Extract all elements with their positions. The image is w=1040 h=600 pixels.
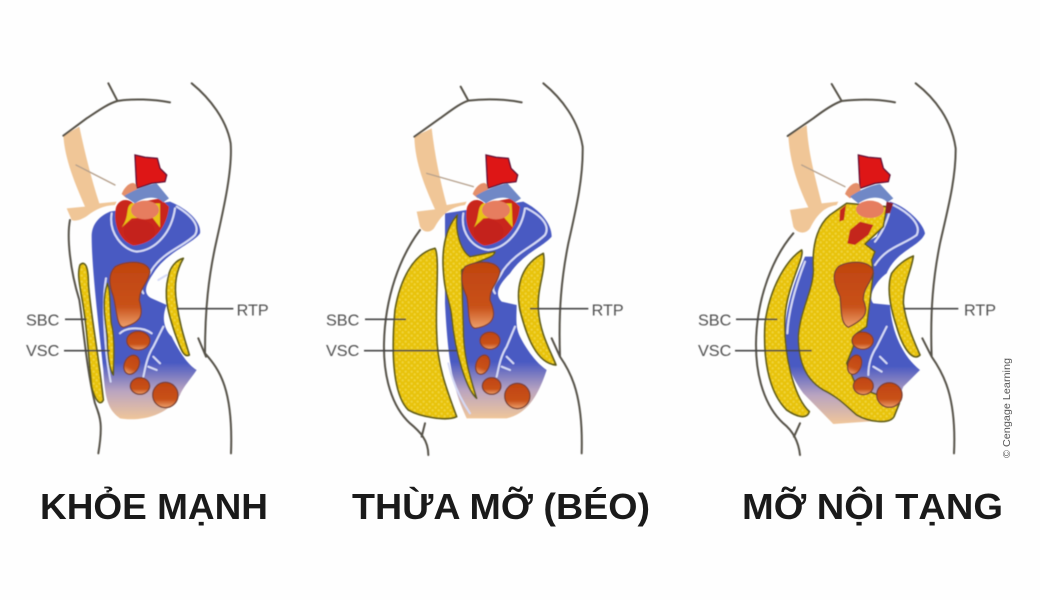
visceral fat (798, 203, 899, 422)
blue abdomen veins (787, 205, 918, 375)
liver (462, 262, 500, 328)
liver (110, 262, 150, 327)
retroperitoneal fat (889, 256, 920, 357)
intestines (845, 332, 902, 407)
body outline (63, 83, 231, 453)
title: visceral fat: MỠ NỘI TẠNG (742, 485, 1003, 527)
subcutaneous fat (765, 250, 809, 417)
label: SBC (698, 313, 777, 330)
copyright credit: © Cengage Learning (1002, 358, 1013, 458)
title: healthy: KHỎE MẠNH (40, 485, 268, 527)
panel: overweight figure (326, 83, 624, 455)
label: RTP (903, 302, 996, 319)
label: RTP: RTP (237, 302, 269, 319)
label: VSC (26, 343, 110, 360)
label: VSC: VSC (26, 343, 59, 360)
title: overweight: THỪA MỠ (BÉO) (352, 485, 650, 527)
label: SBC: SBC (698, 313, 731, 330)
icon: heart and blue abdomen (104, 155, 197, 382)
retroperitoneal fat (519, 253, 556, 365)
subcutaneous fat (79, 263, 103, 403)
label: SBC (26, 313, 87, 330)
label: SBC: SBC (26, 313, 59, 330)
label: RTP: RTP (592, 302, 624, 319)
label: SBC: SBC (326, 313, 359, 330)
visceral fat (443, 215, 495, 398)
body outline (384, 83, 583, 455)
label: RTP (177, 302, 269, 319)
retroperitoneal fat (166, 258, 189, 356)
liver (834, 262, 873, 327)
panel: visceral fat figure (698, 83, 996, 455)
intestines (121, 331, 178, 408)
label: VSC: VSC (698, 343, 731, 360)
icon: heart and blue abdomen (448, 155, 547, 413)
label: VSC: VSC (326, 343, 359, 360)
label: SBC (326, 313, 406, 330)
visceral fat (104, 283, 114, 375)
intestines (473, 332, 530, 409)
label: VSC (326, 343, 457, 360)
panel: healthy figure (26, 83, 269, 453)
label: RTP: RTP (964, 302, 996, 319)
label: RTP (530, 302, 624, 319)
body outline (756, 83, 956, 455)
subcutaneous fat (393, 248, 457, 419)
icon: heart (839, 155, 893, 245)
label: VSC (698, 343, 812, 360)
